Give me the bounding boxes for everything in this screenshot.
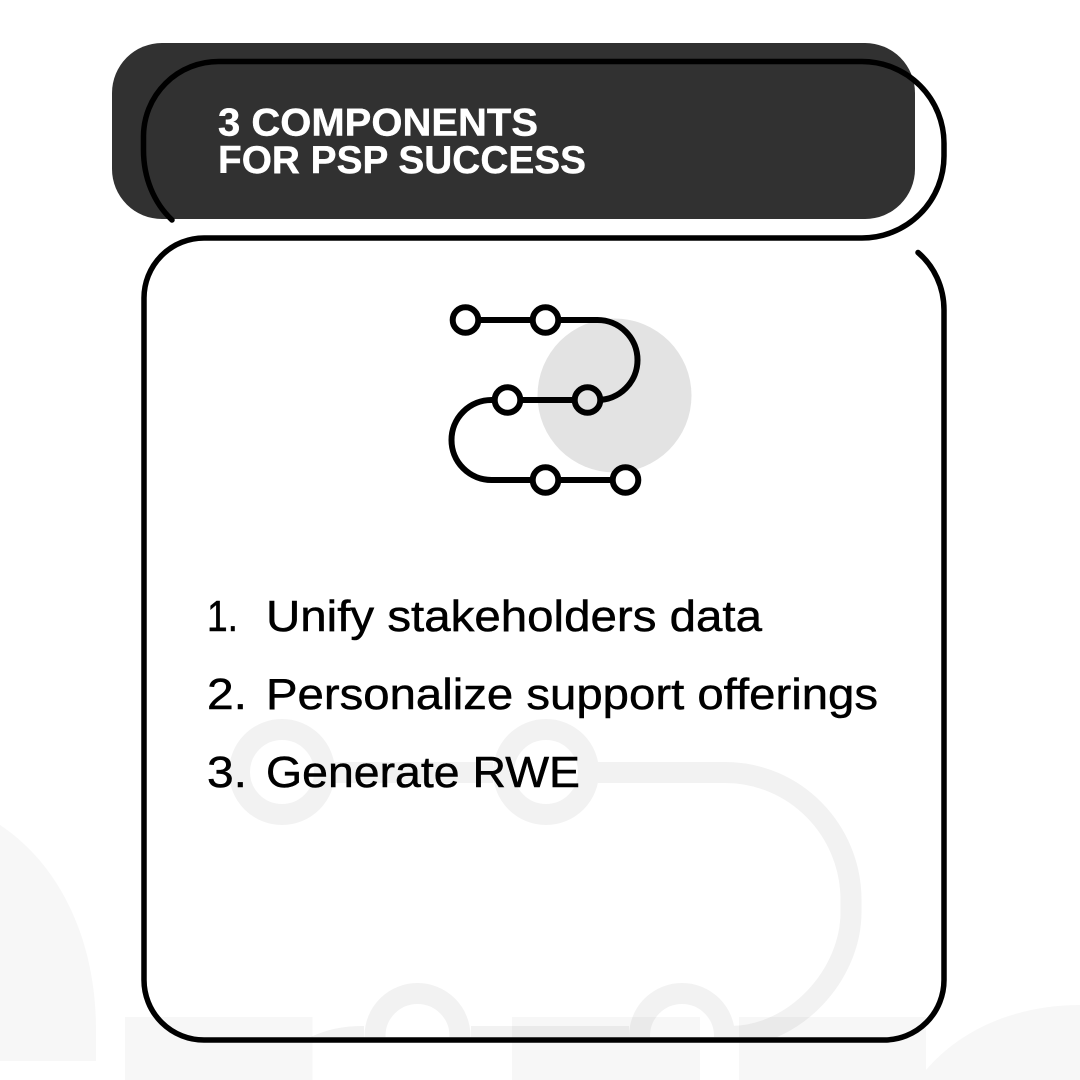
item 2: 2. bbox=[207, 670, 247, 719]
background pipeline motif bbox=[240, 730, 851, 1078]
infographic canvas bbox=[112, 43, 947, 1043]
background shapes bbox=[0, 825, 1080, 1080]
header bar bbox=[112, 43, 915, 219]
item 1: Unify stakeholders data bbox=[266, 592, 763, 641]
icon path bbox=[452, 320, 638, 480]
icon backdrop circle bbox=[538, 318, 692, 472]
panel outline bbox=[144, 62, 944, 1040]
title bbox=[218, 102, 586, 182]
icon nodes bbox=[453, 307, 638, 493]
title: FOR PSP SUCCESS bbox=[218, 139, 586, 182]
item 1: 1. bbox=[207, 592, 238, 641]
item 3: 3. bbox=[207, 748, 247, 797]
icon: connected path with nodes bbox=[452, 307, 692, 493]
item 3: Generate RWE bbox=[266, 748, 580, 797]
item 2: Personalize support offerings bbox=[266, 670, 878, 719]
list of components bbox=[207, 592, 878, 797]
title: 3 COMPONENTS bbox=[218, 102, 538, 144]
